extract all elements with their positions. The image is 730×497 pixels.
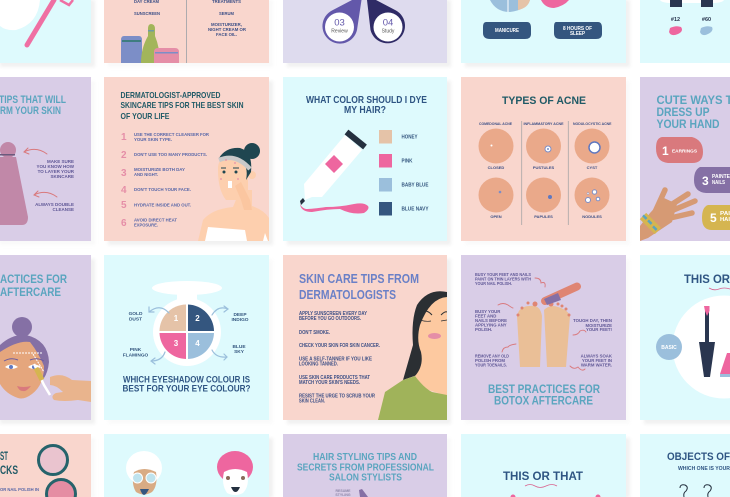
title: SKINCARE TIPS FOR THE BEST SKIN <box>120 100 244 110</box>
teardrop 03 review <box>322 0 362 44</box>
icon: palette: 3 <box>174 339 179 348</box>
palette labels: DUST <box>129 316 142 322</box>
palette labels: BLUE <box>232 344 246 350</box>
teardrop 03 review: Review <box>331 28 348 34</box>
swatch labels <box>402 134 429 212</box>
blob 1 earrings: EARRINGS <box>672 148 698 154</box>
callouts: CLEANSE <box>52 207 74 212</box>
panel: face masks card <box>104 434 269 497</box>
title: HAIR STYLING TIPS AND <box>313 451 417 463</box>
blob 3 painted nails <box>694 167 730 193</box>
arrows <box>149 306 228 364</box>
title: YOUR HAND <box>656 119 720 131</box>
tips list: APPLY SUNSCREEN EVERY DAY <box>299 311 368 317</box>
title <box>306 94 427 116</box>
pink blob <box>541 0 569 8</box>
callouts left <box>475 272 531 368</box>
callouts left: REMOVE ANY OLD <box>475 354 509 358</box>
pie slices <box>490 0 530 12</box>
numbers: 3 <box>121 168 127 179</box>
title <box>120 92 244 119</box>
panel: this or that, polish <box>640 255 730 420</box>
callouts right: YOUR FEET IN <box>582 358 612 363</box>
callouts <box>35 159 75 212</box>
title: CKS <box>0 465 18 477</box>
title: SKIN CARE TIPS FROM <box>299 271 419 286</box>
routine labels <box>134 0 247 37</box>
tips list: MATCH YOUR SKIN'S NEEDS. <box>299 380 361 386</box>
callouts left: PAINT ON THIN LAYERS WITH <box>475 276 531 282</box>
illustration: woman touching face <box>198 143 269 241</box>
callouts left: BUSY YOUR <box>475 309 501 314</box>
illustration: hand with bracelet <box>640 190 695 241</box>
routine labels: SERUM <box>219 11 234 16</box>
title: BEST PRACTICES FOR <box>488 382 600 396</box>
routine labels: NIGHT CREAM OR <box>208 27 247 32</box>
title: WHAT COLOR SHOULD I DYE <box>306 94 427 106</box>
tips list: DON'T USE TOO MANY PRODUCTS. <box>134 152 207 157</box>
icon: polish brush <box>699 306 715 377</box>
panel: skin care tips from dermatologists <box>283 255 447 420</box>
illustration: feet <box>516 286 577 367</box>
tips list: HYDRATE INSIDE AND OUT. <box>134 202 191 208</box>
illustration: woman with closed eyes <box>378 291 447 420</box>
tips list: YOUR SKIN TYPE. <box>134 137 172 142</box>
blob 5: 5 <box>710 211 717 225</box>
numbers: 6 <box>121 218 127 229</box>
numbers: 2 <box>121 150 127 161</box>
column labels <box>479 121 612 126</box>
callouts: MAKE SURE <box>47 159 74 164</box>
tips list: AVOID DIRECT HEAT <box>134 218 177 222</box>
acne labels <box>488 165 602 219</box>
pill sleep: 8 HOURS OF <box>563 26 592 32</box>
palette labels: SKY <box>234 349 245 355</box>
tips list: USE THE CORRECT CLEANSER FOR <box>134 132 210 137</box>
illustration: face with cucumber eyes <box>126 451 162 495</box>
palette labels: FLAMINGO <box>123 352 149 358</box>
title: DERMATOLOGIST-APPROVED <box>120 90 220 100</box>
title: DERMATOLOGISTS <box>299 287 396 302</box>
teardrop 04 study: 04 <box>383 18 393 28</box>
numbers: 1 <box>121 132 127 143</box>
routine labels: FACE OIL. <box>216 32 237 37</box>
icon: palette: 4 <box>195 339 200 348</box>
palette labels: GOLD <box>129 311 143 317</box>
palette labels: INDIGO <box>231 317 249 323</box>
teardrop 04 study <box>367 0 405 43</box>
title <box>488 382 600 408</box>
panel: compact tricks card <box>0 434 91 497</box>
basic badge: BASIC <box>661 345 677 351</box>
illustration: face with pink turban <box>217 451 253 495</box>
blob 5: PAI <box>720 211 730 217</box>
title <box>0 94 66 117</box>
palette labels: PINK <box>130 347 142 353</box>
numbers <box>121 133 126 226</box>
title: SALON STYLISTS <box>329 472 402 484</box>
blob 5: HAI <box>720 217 730 223</box>
tips list <box>299 311 381 404</box>
acne labels: CYST <box>587 165 598 170</box>
callouts left: YOUR NAIL POLISH. <box>475 281 512 286</box>
callouts left: YOUR TOENAILS. <box>475 362 507 368</box>
numbers: 5 <box>121 200 127 211</box>
acne labels: NODULES <box>582 214 602 219</box>
title: AFTERCARE <box>0 285 61 299</box>
swatch labels: HONEY <box>402 134 418 140</box>
title <box>297 451 434 484</box>
panel: eyeshadow palette <box>104 255 269 420</box>
numbers: 4 <box>121 185 127 196</box>
panel: morning and night routine card <box>104 0 269 63</box>
title <box>0 451 18 477</box>
title <box>0 272 67 299</box>
illustration: face with syringe <box>0 317 91 402</box>
blob 1 earrings <box>656 137 703 163</box>
panel: objects of card <box>640 434 730 497</box>
panel: shade swatches card: #12 <box>671 17 680 23</box>
title: ACTICES FOR <box>0 272 67 286</box>
routine labels: SUNSCREEN <box>134 11 160 16</box>
small caption: RESUME <box>336 489 351 493</box>
lesions <box>490 142 600 202</box>
title: BEST FOR YOUR EYE COLOUR? <box>122 384 250 394</box>
column labels: NODULOCYSTIC ACNE <box>573 121 612 126</box>
callouts right: MOISTURIZE <box>586 323 612 328</box>
title: OF YOUR LIFE <box>120 111 170 121</box>
routine labels: MOISTURIZER, <box>211 22 242 27</box>
pill sleep <box>554 22 602 39</box>
tips list: USE SKIN CARE PRODUCTS THAT <box>299 375 370 381</box>
icon: polish wedge <box>720 353 730 377</box>
basic badge <box>656 334 682 360</box>
blob 3 painted nails: PAINTE <box>712 174 730 180</box>
title: MY HAIR? <box>344 104 386 116</box>
callouts left: APPLYING ANY <box>475 322 507 328</box>
title: DRESS UP <box>656 107 710 119</box>
acne labels: PAPULES <box>534 214 553 219</box>
title: SECRETS FROM PROFESSIONAL <box>297 462 434 474</box>
icon: hair tool <box>359 489 368 497</box>
callouts left: NAILS BEFORE <box>475 318 507 323</box>
swatch labels: BABY BLUE <box>402 182 429 188</box>
tips list: CHECK YOUR SKIN FOR SKIN CANCER. <box>299 343 381 349</box>
acne labels: OPEN <box>490 214 502 219</box>
icon: palette <box>152 281 222 366</box>
panel: hair styling tips card <box>283 434 447 497</box>
callouts left: FEET AND <box>475 314 496 318</box>
palette labels: DEEP <box>233 312 247 318</box>
teardrop 04 study: Study <box>382 28 395 34</box>
swatch labels: BLUE NAVY <box>402 206 429 212</box>
white circle <box>672 296 730 398</box>
panel: this or that bottom card <box>461 434 626 497</box>
pill manicure <box>483 22 531 39</box>
swatch labels: PINK <box>402 158 413 164</box>
title <box>299 274 418 299</box>
blob 3 painted nails: NAILS <box>712 180 726 186</box>
tips list: SKIN CLEAN. <box>299 398 325 404</box>
column labels: COMEDONAL ACNE <box>479 121 512 126</box>
callouts: SKINCARE <box>50 174 74 179</box>
icon: palette: 1 <box>174 314 179 323</box>
acne labels: CLOSED <box>488 165 504 170</box>
panel: cute ways to dress up your hand <box>640 77 730 241</box>
tips list: LOOKING TANNED. <box>299 362 339 368</box>
panel: study cycle card <box>283 0 447 63</box>
callouts: ALWAYS DOUBLE <box>35 202 74 207</box>
arrows <box>24 148 57 197</box>
callouts left: BUSY YOUR FEET AND NAILS <box>475 272 531 277</box>
teardrop 03 review: 03 <box>334 18 345 28</box>
tips list: EXPOSURE. <box>134 222 158 228</box>
acne labels: PUSTULES <box>533 165 554 170</box>
callouts right: WARM WATER. <box>581 362 612 368</box>
tips list: MOISTURIZE BOTH DAY <box>134 167 185 172</box>
callouts: YOU KNOW HOW <box>36 164 75 169</box>
title: TIPS THAT WILL <box>0 94 66 106</box>
panel: shade swatches card <box>640 0 730 63</box>
panel: skincare tips bottle card <box>0 77 91 241</box>
title <box>122 374 250 394</box>
title: THIS OR <box>684 274 730 286</box>
panel: compact tricks card: OR NAIL POLISH IN <box>0 487 39 492</box>
title: RM YOUR SKIN <box>0 105 61 117</box>
panel: self-care pie card <box>461 0 626 63</box>
icon: compact <box>38 446 76 497</box>
pill sleep: SLEEP <box>570 31 586 37</box>
column labels: INFLAMMATORY ACNE <box>524 121 564 126</box>
panel: what color should I dye my hair <box>283 77 447 241</box>
title <box>656 95 730 131</box>
title: BOTOX AFTERCARE <box>494 394 593 408</box>
tips list: DON'T TOUCH YOUR FACE. <box>134 187 191 192</box>
acne circles <box>478 128 610 212</box>
panel: types of acne <box>461 77 626 241</box>
pill manicure: MANICURE <box>495 28 520 34</box>
squiggle arrows <box>498 278 586 370</box>
swatches <box>379 130 392 216</box>
panel: dermatologist-approved tips <box>104 77 269 241</box>
icon: hangers <box>680 485 711 497</box>
small caption: STYLING <box>335 493 351 497</box>
tips list: RESIST THE URGE TO SCRUB YOUR <box>299 394 375 400</box>
tips list: AND NIGHT. <box>134 172 158 177</box>
blob 1 earrings: 1 <box>662 144 669 158</box>
skincare bottles <box>121 24 179 63</box>
title: TYPES OF ACNE <box>502 95 586 107</box>
icon: dye tube <box>300 132 368 214</box>
title: WHICH EYESHADOW COLOUR IS <box>123 374 250 384</box>
panel: best practices for botox aftercare <box>461 255 626 420</box>
tips list: DON'T SMOKE. <box>299 330 331 336</box>
blob 5 <box>702 205 730 230</box>
panel: razor card, top row <box>0 0 91 63</box>
blob 3 painted nails: 3 <box>702 174 709 188</box>
title: THIS OR THAT <box>503 471 583 483</box>
tips list: BEFORE YOU GO OUTDOORS. <box>299 316 362 322</box>
callouts right: YOUR FEET! <box>586 327 613 332</box>
tips list: USE A SELF-TANNER IF YOU LIKE <box>299 356 373 362</box>
callouts left: POLISH. <box>475 327 492 332</box>
callouts right: ALWAYS SOAK <box>581 354 613 358</box>
palette labels <box>123 311 249 358</box>
callouts right <box>573 318 613 368</box>
panel: shade swatches card: #60 <box>702 17 711 23</box>
title: ST <box>0 451 8 463</box>
icon: palette: 2 <box>195 314 200 323</box>
callouts left: POLISH FROM <box>475 358 505 363</box>
tips list <box>134 132 210 228</box>
panel: practices aftercare face <box>0 255 91 420</box>
callouts: TO LAYER YOUR <box>38 169 75 174</box>
small caption <box>335 489 351 497</box>
icon: bottle <box>0 142 28 225</box>
callouts right: TOUGH DAY, THEN <box>573 318 612 323</box>
